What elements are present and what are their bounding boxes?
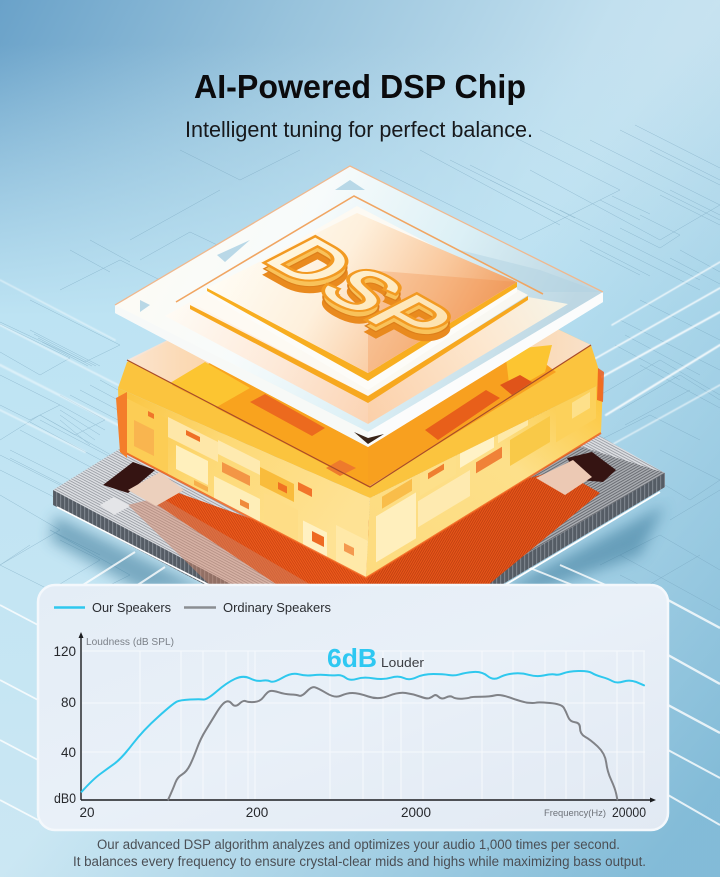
6dB louder callout (327, 643, 425, 673)
contact pads (128, 472, 184, 506)
background circuit traces (0, 120, 720, 610)
right face circuit blocks (376, 386, 596, 562)
y axis labels (53, 644, 76, 806)
inner frame line (176, 196, 543, 302)
red circuit area (150, 490, 368, 600)
chart grid (82, 651, 645, 799)
orange circuit block (116, 330, 604, 579)
light beams (0, 262, 720, 452)
stacked gold square (190, 206, 528, 403)
y axis labels: 120 (53, 644, 76, 659)
orange circuit seen through the plate (172, 350, 368, 487)
chip illustration (53, 166, 665, 602)
DSP 3D lettering: DSP (243, 237, 477, 365)
y axis labels: dB0 (54, 791, 76, 806)
x axis title: Frequency(Hz) (544, 808, 606, 819)
description text: Our advanced DSP algorithm analyzes and optimizes your audio 1,000 times per second. (97, 837, 620, 852)
6dB louder callout: Louder (381, 655, 425, 670)
legend: Our Speakers (92, 601, 171, 615)
DSP 3D lettering: DSP (243, 231, 477, 359)
description text: It balances every frequency to ensure crystal-clear mids and highs while maximizing bass output. (73, 854, 646, 869)
subtitle: Intelligent tuning for perfect balance. (185, 117, 533, 142)
left face circuit blocks (127, 398, 368, 577)
our speakers curve (82, 671, 644, 792)
description text (73, 837, 646, 869)
x axis labels (79, 805, 646, 820)
glass tick marks (140, 180, 365, 312)
block right face (366, 383, 603, 578)
panel: loudness chart (38, 585, 668, 830)
mid plate (127, 240, 591, 487)
chip shadow on background (50, 505, 665, 590)
block top under plate (118, 240, 603, 498)
x axis labels: 2000 (401, 805, 431, 820)
title: AI-Powered DSP Chip (194, 68, 526, 105)
DSP 3D lettering: DSP (243, 225, 477, 353)
legend (54, 601, 331, 615)
top glass plate (115, 166, 603, 447)
y axis title: Loudness (dB SPL) (86, 636, 174, 648)
y axis labels: 80 (61, 695, 76, 710)
legend: Ordinary Speakers (223, 601, 331, 615)
x axis labels: 20 (79, 805, 95, 820)
6dB louder callout: 6dB (327, 643, 377, 673)
x axis labels: 200 (246, 805, 268, 820)
y axis labels: 40 (61, 745, 76, 760)
block left face (118, 388, 370, 578)
right window (567, 452, 616, 482)
ordinary speakers curve (168, 687, 617, 799)
x axis labels: 20000 (612, 805, 646, 820)
substrate board (53, 300, 665, 600)
left window (103, 462, 155, 493)
axes (78, 632, 656, 802)
lower light beams (0, 552, 720, 825)
